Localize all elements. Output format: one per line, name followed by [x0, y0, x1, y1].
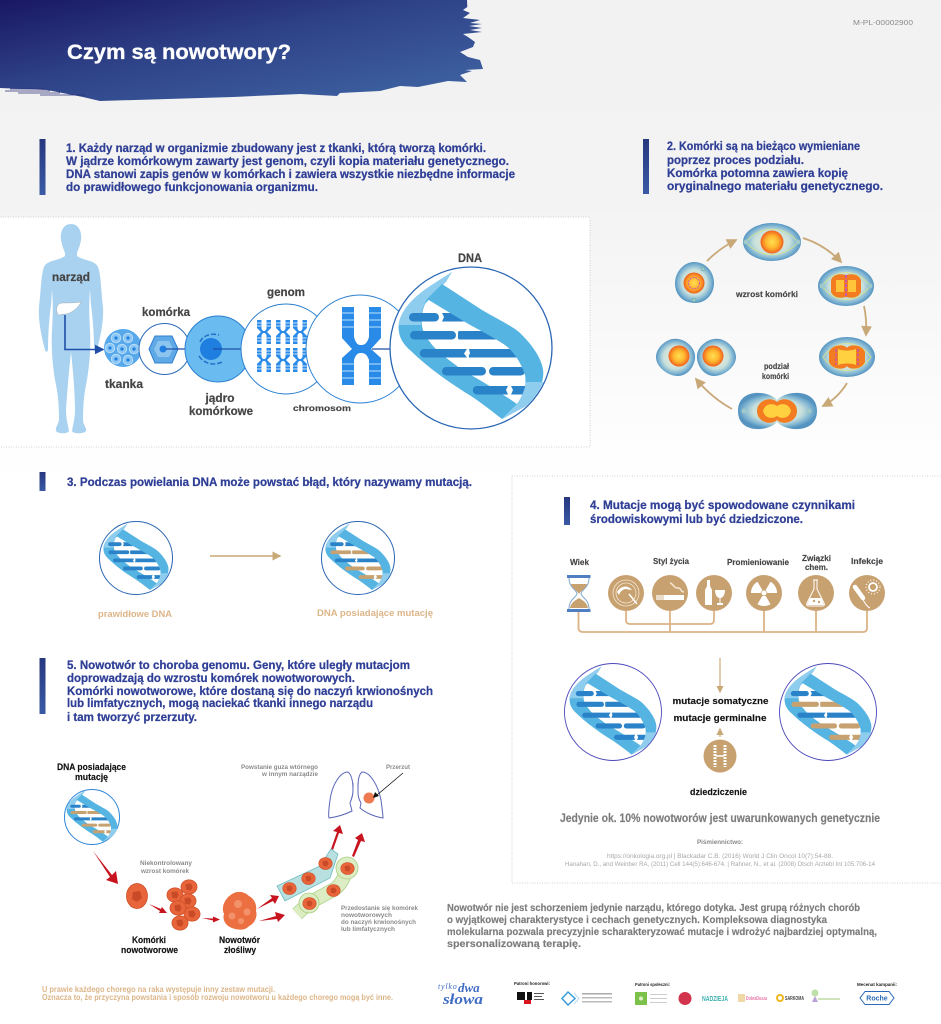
label: cancer cells: nowotworowe — [121, 945, 178, 955]
label: germline mutations: mutacje germinalne — [674, 713, 766, 724]
arrow: normal to mutated — [210, 555, 280, 557]
document code: M-PL-00002900 — [853, 18, 913, 27]
label: somatic mutations: mutacje somatyczne — [672, 696, 768, 707]
label: jądro komórkowe: jądro — [204, 393, 234, 405]
label: cancer cells — [121, 935, 178, 955]
icon: radiation — [746, 575, 782, 611]
footer note: Oznacza to, że przyczyna powstania i sposób rozwoju nowotworu u każdego chorego mogą być inne. — [42, 993, 393, 1002]
icon: inherited chromosome — [704, 740, 736, 772]
logo: foundation — [562, 992, 612, 1005]
lymph vessel — [297, 857, 358, 914]
icon: diet — [608, 575, 644, 611]
connector organ to tissue — [65, 315, 103, 350]
logo: yellow — [777, 995, 804, 1002]
cell 6: daughter cells — [656, 339, 736, 376]
circle: DNA — [390, 267, 552, 429]
section 2 heading: poprzez proces podziału. — [667, 153, 804, 167]
cell 5: telophase — [738, 393, 817, 429]
diagram: cancer progression — [57, 762, 418, 955]
references: https://onkologia.org.pl | Blackadar C.B. (2016) World J Clin Oncol 10(7):54-88. — [607, 853, 833, 860]
risk factors — [567, 553, 885, 632]
circle: genome — [241, 304, 331, 394]
mutated DNA circle — [780, 664, 876, 760]
cell cluster — [167, 880, 200, 930]
connector lines — [578, 611, 867, 632]
label: malignant tumour: Nowotwór — [219, 935, 260, 945]
label: entering vessels: lub limfatycznych — [341, 926, 395, 933]
diagram: cell cycle — [656, 223, 875, 429]
section 2 heading — [643, 139, 883, 194]
label: jądro komórkowe: komórkowe — [189, 406, 253, 418]
social patrons: Patroni społeczni: — [635, 982, 670, 987]
logo: Roche: Roche — [866, 996, 888, 1002]
cycle arrows — [696, 238, 866, 409]
label: DNA: DNA — [458, 253, 482, 265]
label: mutated DNA: DNA posiadające mutację — [317, 608, 433, 619]
icon: liver — [57, 302, 81, 315]
section 1 heading: DNA stanowi zapis genów w komórkach i zawiera wszystkie niezbędne informacje — [66, 167, 515, 181]
summary paragraph: spersonalizowaną terapię. — [447, 939, 581, 950]
label: entering vessels — [341, 905, 418, 933]
label: Związki chem. — [802, 553, 831, 572]
malignant tumour — [223, 892, 257, 930]
campaign sponsor: Mecenat kampanii: — [857, 982, 897, 987]
logo: tylko dwa słowa: tylko — [438, 982, 458, 991]
label: malignant tumour — [219, 935, 260, 955]
references — [565, 839, 876, 868]
campaign sponsor — [857, 982, 897, 1004]
label: podział komórki: komórki — [762, 371, 789, 381]
label: uncontrolled growth — [140, 860, 192, 875]
icon: alcohol — [696, 575, 732, 611]
circle: cell — [139, 324, 190, 374]
section 3 heading — [40, 472, 472, 491]
arrow: metastasis pointer — [373, 773, 403, 798]
icon: hourglass — [567, 575, 590, 612]
brush streaks — [5, 89, 85, 95]
mutated DNA icon — [322, 522, 394, 594]
section 2 heading: Komórka potomna zawiera kopię — [667, 166, 848, 180]
blood vessel — [277, 849, 338, 901]
red arrows — [93, 825, 365, 922]
normal DNA icon — [100, 522, 172, 594]
metastasis spot — [364, 792, 374, 804]
cell 3: metaphase — [818, 266, 874, 306]
section 1 heading: W jądrze komórkowym zawarty jest genom, czyli kopia materiału genetycznego. — [66, 154, 509, 168]
label: entering vessels: do naczyń krwionośnych — [341, 919, 416, 926]
summary paragraph: molekularna pozwala precyzyjnie scharakteryzować mutacje i wdrożyć najbardziej optymalną, — [447, 927, 877, 938]
label: Związki chem.: chem. — [805, 562, 828, 572]
label: dziedziczenie: dziedziczenie — [690, 787, 747, 798]
label: jądro komórkowe — [189, 393, 253, 418]
label: Wiek: Wiek — [570, 557, 589, 567]
mutation types diagram — [564, 658, 876, 798]
healthy DNA circle — [564, 664, 662, 760]
label: metastasis: Przerzut — [386, 764, 411, 771]
references: Hanahan, D., and Weinber RA, (2011) Cell 144(5):646-674. | Rahner, N., et al. (2008) Dtsch Arztebl Int 105:706-14 — [565, 861, 876, 868]
logo: pink: DobraDusza — [746, 996, 767, 1002]
cell 2: prophase — [743, 223, 801, 261]
icon: infection — [849, 575, 885, 611]
section 5 heading: i tam tworzyć przerzuty. — [67, 710, 197, 724]
title banner — [0, 0, 483, 101]
section 2 heading: oryginalnego materiału genetycznego. — [667, 179, 883, 193]
single cancer cell — [126, 884, 148, 908]
label: secondary tumour — [241, 764, 318, 778]
label: tkanka: tkanka — [105, 379, 144, 391]
label: uncontrolled growth: wzrost komórek — [140, 868, 189, 875]
arrow: down to somatic — [719, 658, 721, 692]
panel: diagram background — [0, 217, 590, 447]
circle: chromosome — [306, 295, 414, 403]
section 4 heading — [564, 497, 855, 526]
section 3 heading: 3. Podczas powielania DNA może powstać błąd, który nazywamy mutacją. — [67, 475, 472, 489]
label: mutated DNA — [57, 762, 126, 783]
summary paragraph: o wyjątkowej charakterystyce i cechach genetycznych. Kompleksowa diagnostyka — [447, 915, 827, 926]
logo: ministry — [517, 992, 544, 1004]
section 1 heading: 1. Każdy narząd w organizmie zbudowany jest z tkanki, którą tworzą komórki. — [66, 141, 486, 155]
logo: red circle — [678, 992, 692, 1005]
page background — [0, 0, 941, 480]
label: entering vessels: nowotworowych — [341, 912, 392, 919]
label: Infekcje: Infekcje — [851, 556, 883, 566]
logo: yellow: SARKOMA — [785, 996, 804, 1002]
label: secondary tumour: w innym narządzie — [261, 771, 318, 778]
label: normal DNA: prawidłowe DNA — [98, 609, 172, 620]
footer note — [42, 985, 393, 1002]
mutated DNA icon — [64, 790, 120, 844]
logo: tylko dwa słowa: dwa — [458, 980, 480, 995]
label: uncontrolled growth: Niekontrolowany — [140, 860, 192, 867]
label: mutated DNA: mutację — [75, 772, 108, 783]
human body — [39, 224, 103, 433]
label: komórka: komórka — [142, 307, 191, 319]
references: Piśmiennictwo: — [697, 839, 743, 846]
label: Styl życia: Styl życia — [653, 556, 689, 566]
label: cancer cells: Komórki — [132, 935, 166, 945]
label: entering vessels: Przedostanie się komórek — [341, 905, 418, 912]
cell 4: anaphase — [819, 337, 875, 377]
lungs — [329, 772, 383, 818]
section 1 heading: do prawidłowego funkcjonowania organizmu. — [66, 180, 318, 194]
label: narząd: narząd — [52, 272, 90, 284]
label: chromosom: chromosom — [293, 403, 352, 413]
section 2 heading: 2. Komórki są na bieżąco wymieniane — [667, 139, 860, 153]
section 4 heading: 4. Mutacje mogą być spowodowane czynnikami — [590, 498, 855, 512]
summary paragraph — [447, 903, 877, 950]
section 4 heading: środowiskowymi lub być dziedziczone. — [590, 512, 803, 526]
logo: green square — [635, 992, 667, 1005]
title: Czym są nowotwory? — [67, 41, 291, 64]
section 5 heading — [40, 658, 433, 724]
icon: flask — [798, 575, 834, 611]
logo: Nadzieja: NADZIEJA — [702, 996, 728, 1003]
label: podział komórki: podział — [764, 361, 790, 371]
diagram: from organ to DNA — [39, 224, 552, 433]
label: genom: genom — [267, 287, 305, 299]
label: secondary tumour: Powstanie guza wtórnego — [241, 764, 318, 771]
summary paragraph: Nowotwór nie jest schorzeniem jedynie narządu, którego dotyka. Jest grupą różnych chorób — [447, 903, 860, 914]
section 5 heading: doprowadzają do wzrostu komórek nowotworowych. — [67, 671, 355, 685]
logo: tylko dwa słowa: słowa — [442, 992, 484, 1008]
cell 1: interphase — [675, 262, 714, 303]
social patrons — [635, 982, 840, 1005]
circle: nucleus — [185, 316, 251, 382]
genetic share statement: Jedynie ok. 10% nowotworów jest uwarunkowanych genetycznie — [560, 813, 880, 825]
section 5 heading: lub limfatycznych, mogą naciekać tkanki innego narządu — [67, 696, 373, 710]
footer note: U prawie każdego chorego na raka występuje inny zestaw mutacji. — [42, 985, 275, 994]
section 1 heading — [40, 139, 515, 195]
panel: mutation causes background — [512, 476, 941, 883]
section 5 heading: 5. Nowotwór to choroba genomu. Geny, które uległy mutacjom — [67, 658, 410, 672]
icon: cigarette — [652, 575, 688, 611]
label: podział komórki — [762, 361, 790, 381]
label: Promieniowanie: Promieniowanie — [727, 557, 789, 567]
label: malignant tumour: złośliwy — [224, 945, 256, 955]
section 5 heading: Komórki nowotworowe, które dostaną się do naczyń krwionośnych — [67, 684, 433, 698]
label: mutated DNA: DNA posiadające — [57, 762, 126, 773]
circle: tissue — [104, 329, 142, 367]
honorary patrons — [514, 981, 612, 1005]
logo: pink — [738, 994, 767, 1002]
label: Związki chem.: Związki — [802, 553, 831, 563]
logo: tylko dwa słowa — [438, 980, 484, 1008]
label: wzrost komórki: wzrost komórki — [735, 289, 798, 299]
honorary patrons: Patroni honorowi: — [514, 981, 550, 986]
arrow: up to germline — [719, 729, 721, 737]
logo: green plant — [812, 990, 840, 1002]
